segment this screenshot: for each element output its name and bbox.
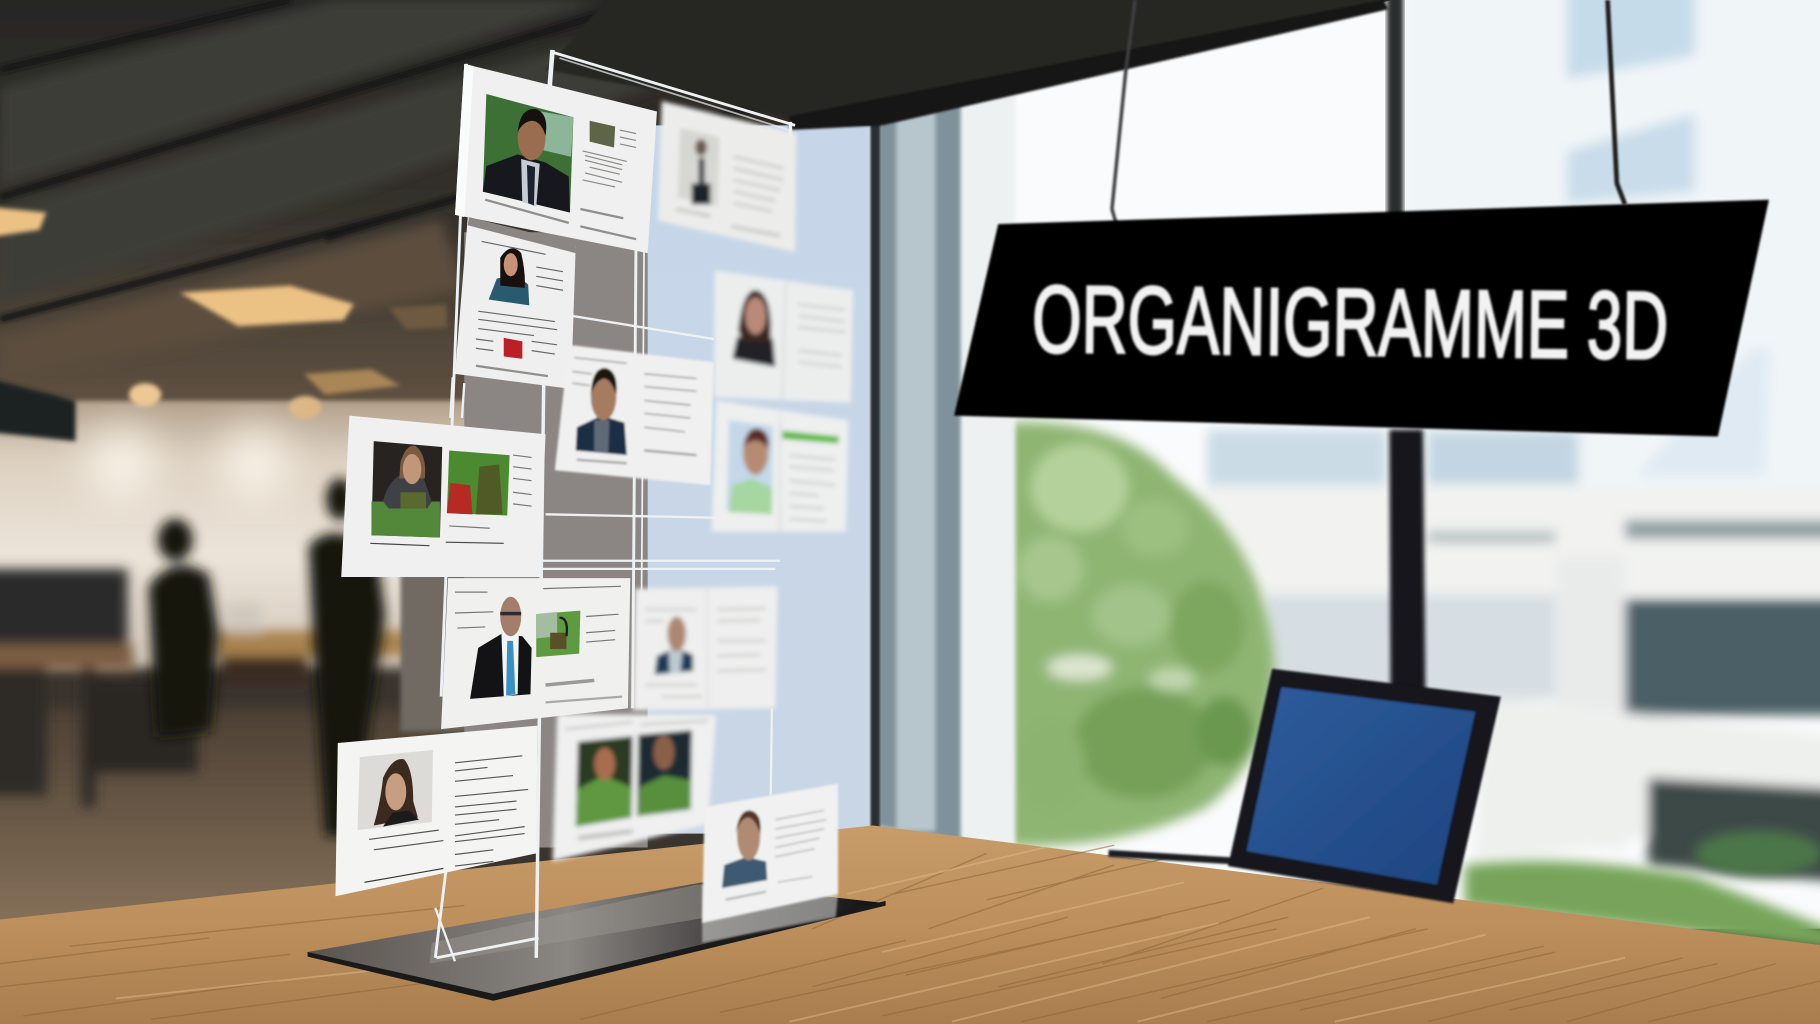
photo: right person in bushes — [637, 730, 692, 816]
light blue wall behind the chart — [644, 125, 876, 834]
back wall — [0, 389, 546, 668]
red logo — [504, 338, 522, 359]
chair back panel — [1247, 687, 1475, 885]
card: two portraits in greenery, blurred — [552, 714, 716, 861]
wall lamps glow — [87, 427, 290, 502]
ceiling edge beam — [789, 0, 1388, 130]
mirrored base of the stand — [308, 882, 886, 1001]
portrait: man with briefcase — [678, 128, 720, 207]
portrait: woman in green — [727, 420, 773, 514]
portrait: person in blue shirt — [722, 810, 767, 888]
hanging cables — [1112, 0, 1625, 225]
card: executive, top — [455, 64, 657, 253]
portrait: dark haired woman — [732, 290, 775, 367]
portrait: woman in teal — [489, 248, 529, 305]
card: man, centre — [555, 345, 714, 485]
floor — [0, 708, 464, 940]
small photo: stump in forest — [536, 611, 580, 657]
hanging sign — [954, 0, 1769, 437]
card: woman with green bar, right blurred — [712, 401, 848, 532]
portrait: long haired woman — [358, 750, 433, 830]
wood grain — [0, 845, 1820, 1022]
card: woman profile, second row — [455, 217, 576, 389]
ceiling panel seams — [0, 0, 836, 319]
portrait: man with navy blazer — [576, 368, 627, 455]
card: woman, right blurred — [714, 271, 853, 403]
window column — [876, 98, 963, 842]
hedge — [1465, 830, 1820, 952]
building — [1201, 0, 1820, 882]
ceiling lighter bands — [0, 0, 766, 383]
ceiling — [0, 0, 1393, 401]
grey panel behind the chart — [464, 232, 648, 848]
photo: left person in bushes — [576, 736, 633, 827]
background: blurred office interior — [0, 0, 1393, 1024]
portrait: man in dark suit — [483, 94, 573, 212]
portrait: woman on dark background — [371, 441, 442, 538]
acrylic frame rods — [435, 50, 795, 961]
sky — [876, 0, 1820, 929]
card: man with blue tie — [441, 578, 630, 729]
silhouettes of people — [149, 478, 385, 836]
small photo — [590, 121, 615, 147]
portrait: man in navy jacket — [655, 616, 693, 675]
card: man, right lower, blurred — [633, 586, 778, 711]
tree — [987, 422, 1274, 846]
grey column behind stand — [400, 557, 470, 731]
dark wall panel — [0, 378, 75, 441]
card: woman, front right, blurred — [702, 784, 838, 923]
portrait: bald man in suit — [470, 597, 532, 699]
window mullion — [1387, 0, 1403, 221]
sign panel — [954, 200, 1769, 437]
wooden table — [0, 825, 1820, 1024]
card: woman with plants — [341, 416, 546, 577]
desks and chairs — [0, 569, 412, 807]
photo: painting in green and red — [447, 450, 510, 515]
card: top right, blurred — [658, 101, 796, 252]
window and outside view — [546, 0, 1820, 952]
ceiling lights — [0, 205, 447, 419]
base reflections — [429, 885, 708, 964]
card: woman, front left — [335, 726, 537, 896]
blue office chair — [1108, 669, 1501, 903]
green bar — [782, 431, 839, 444]
